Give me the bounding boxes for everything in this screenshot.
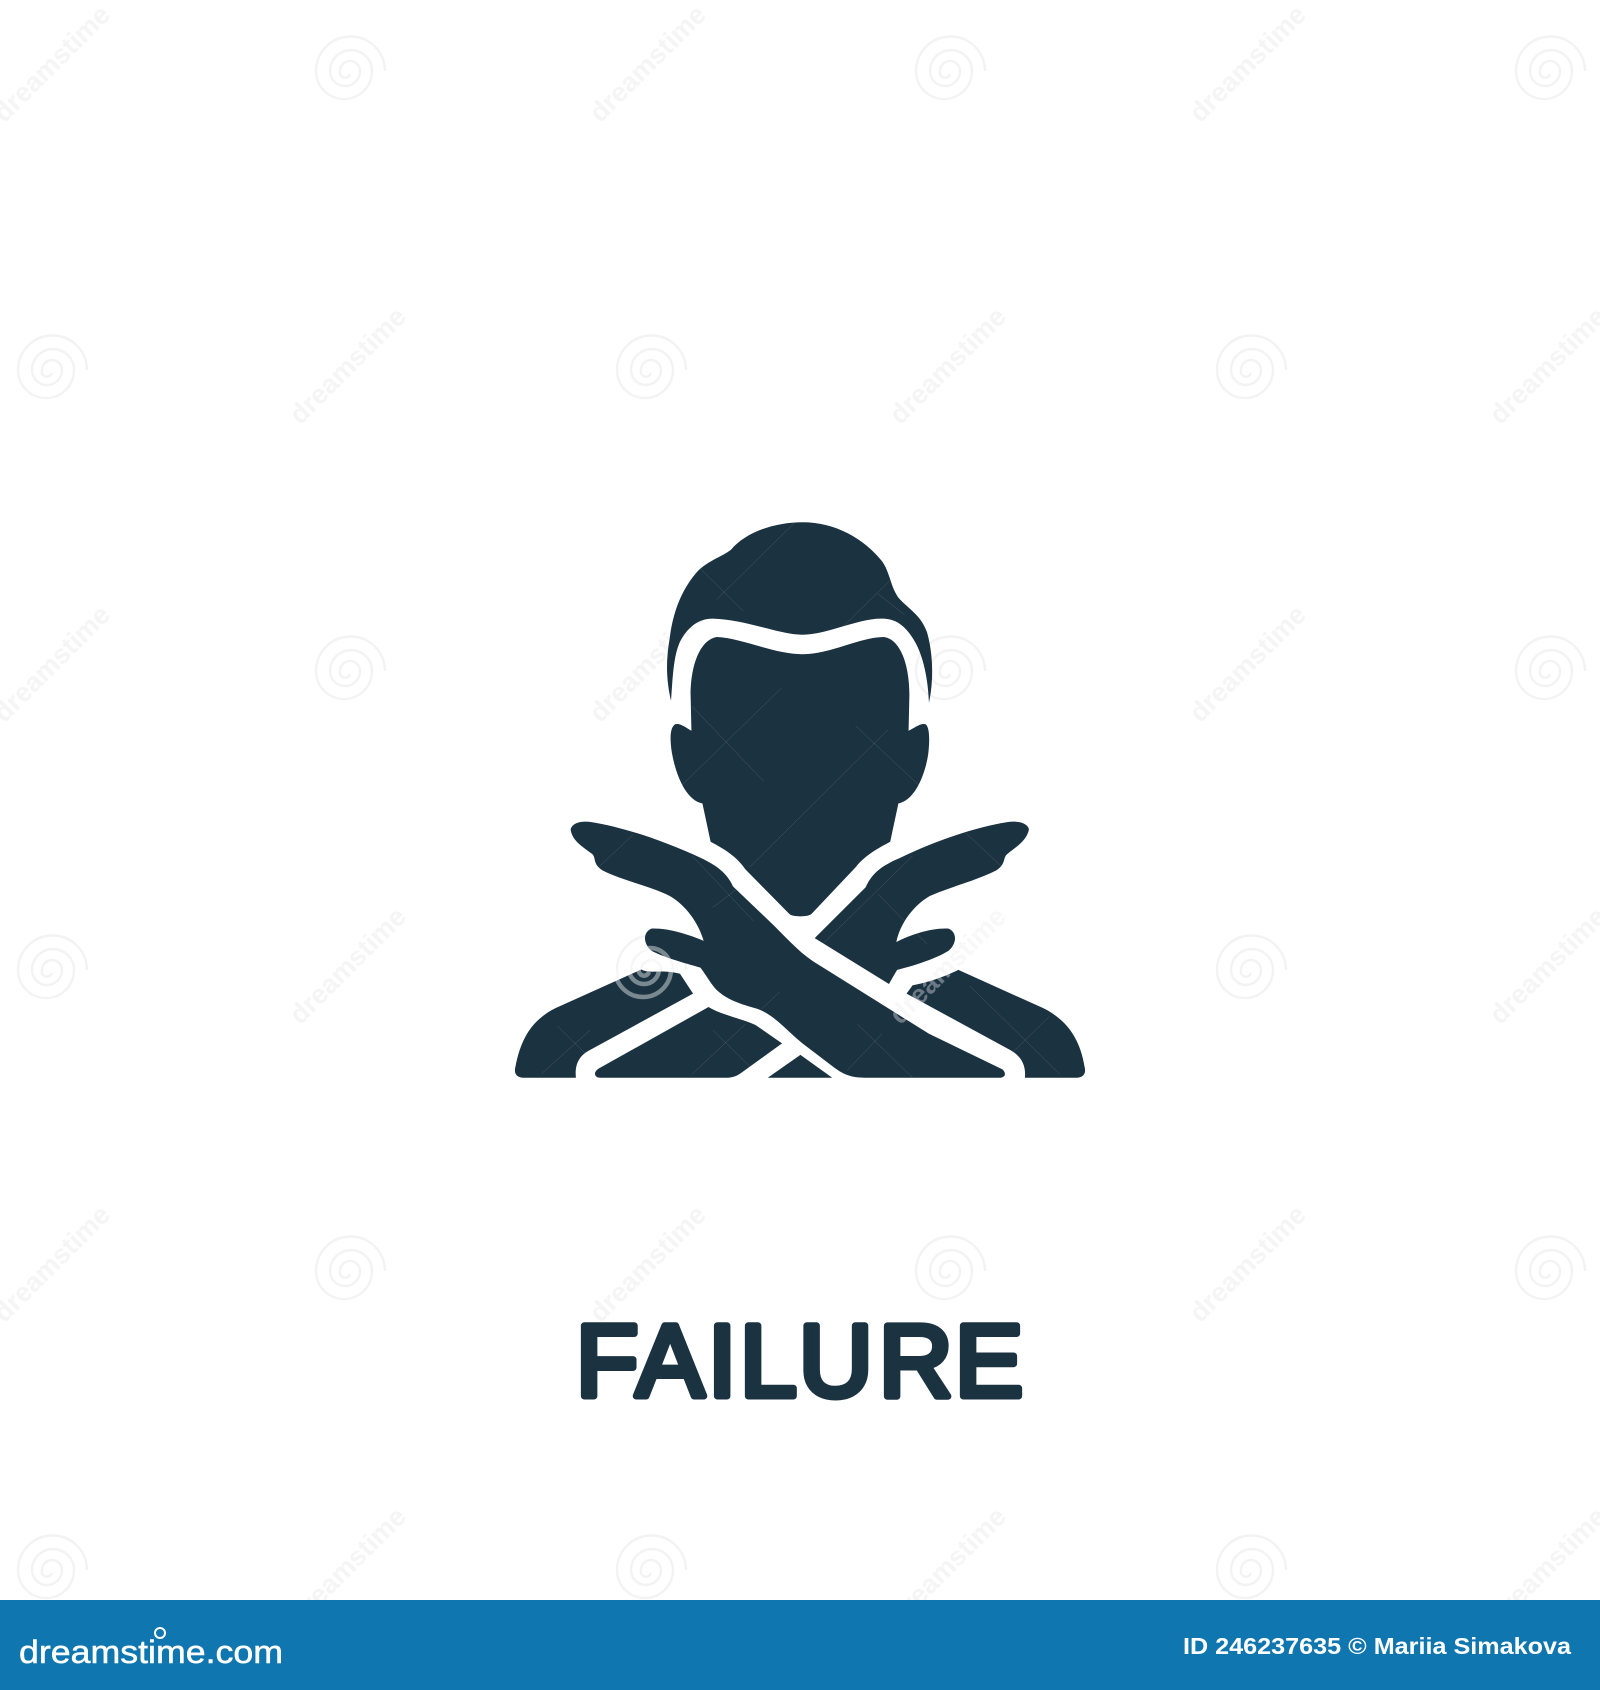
- background watermark pattern: dreamstime: [283, 301, 412, 430]
- footer logo: dreamstime.com: dreamstime.com: [19, 1634, 283, 1670]
- icon part: arm from upper right: [815, 822, 1029, 984]
- watermark spiral on left hand: [615, 948, 671, 997]
- icon part: lower chest triangle: [768, 1055, 832, 1078]
- background watermark pattern: dreamstime: [283, 1501, 412, 1630]
- title: FAILURE: FAILURE: [576, 1304, 1023, 1418]
- footer banner: [0, 1600, 1600, 1690]
- icon: man with crossed arms: [515, 522, 1085, 1078]
- background watermark pattern: dreamstime: [283, 901, 412, 1030]
- icon part: chest: [595, 1007, 782, 1078]
- background watermark pattern: dreamstime: [1183, 599, 1312, 728]
- background watermark pattern: dreamstime: [883, 301, 1012, 430]
- background watermark pattern: dreamstime: [583, 599, 712, 728]
- background watermark pattern: dreamstime: [1183, 1199, 1312, 1328]
- icon part: face and neck: [671, 637, 929, 916]
- background watermark pattern: dreamstime: [583, 0, 712, 128]
- watermark text over right arm: dreamstime: [883, 901, 1012, 1030]
- footer credit: ID 246237635 © Mariia Simakova: [1183, 1633, 1571, 1659]
- icon part: arm from upper left to lower right: [571, 822, 1005, 1078]
- background watermark pattern: dreamstime: [583, 1199, 712, 1328]
- icon part: hair: [667, 522, 932, 703]
- watermark crossing lines over icon: [541, 523, 1060, 1078]
- icon part: left shoulder: [515, 970, 693, 1078]
- background watermark pattern: dreamstime: [1183, 0, 1312, 128]
- icon part: right shoulder: [907, 970, 1085, 1078]
- background watermark pattern: dreamstime: [883, 901, 1012, 1030]
- background watermark pattern: dreamstime: [883, 1501, 1012, 1630]
